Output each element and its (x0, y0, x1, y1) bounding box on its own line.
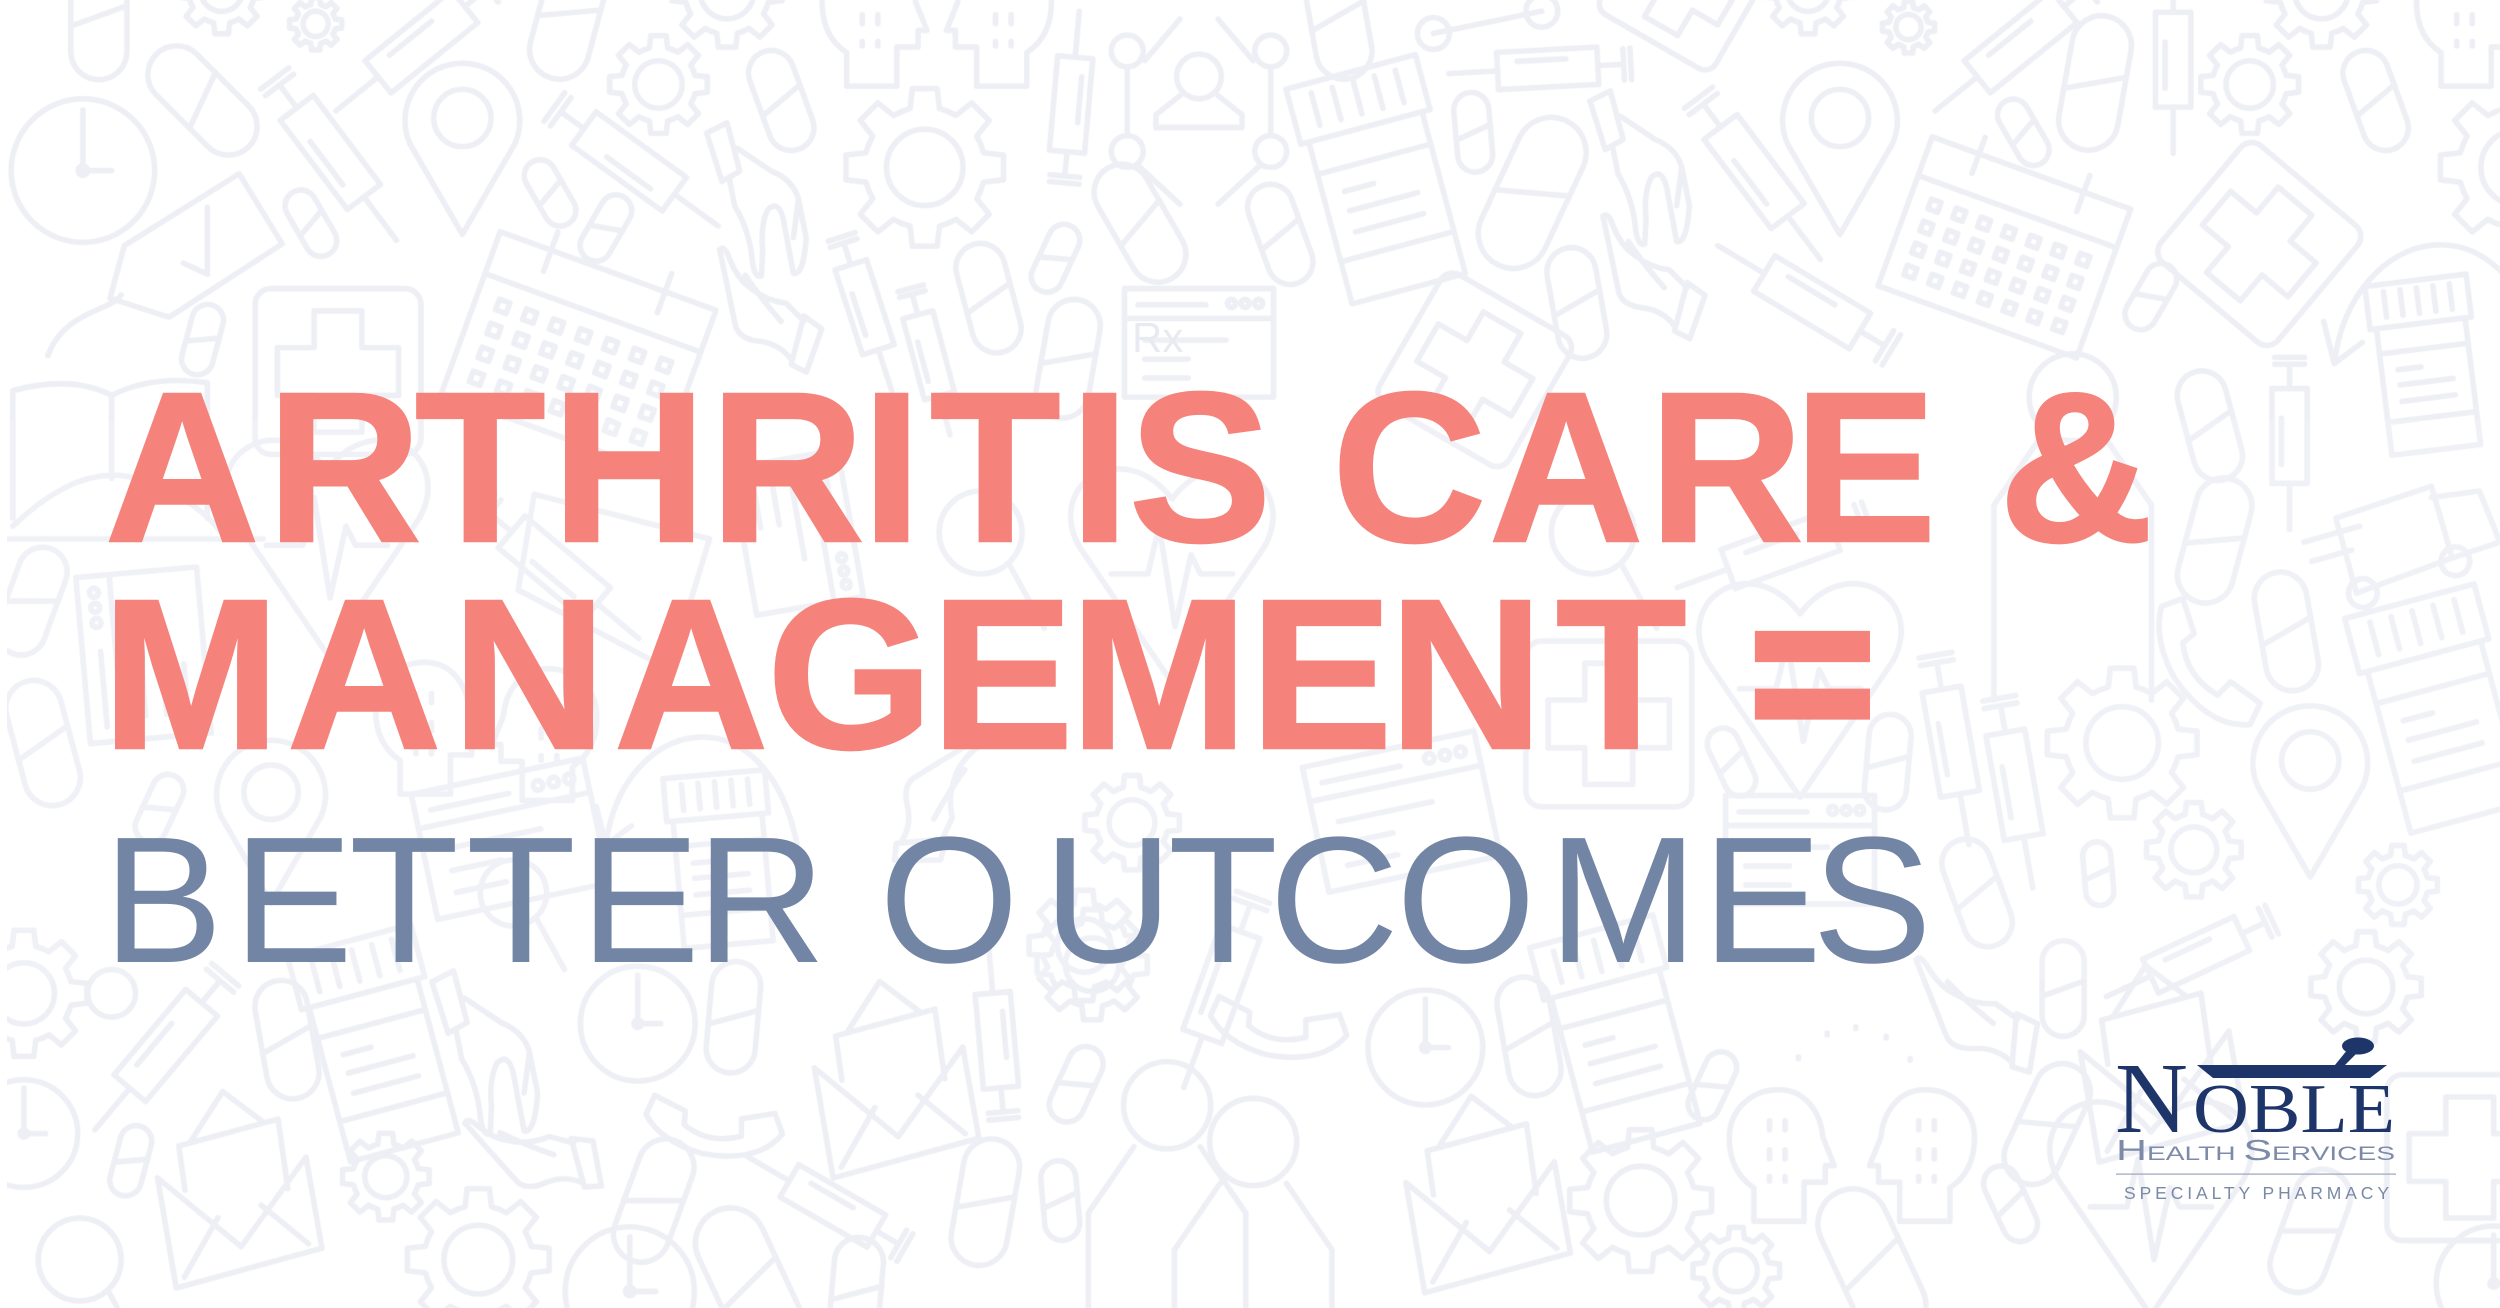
logo tagline: SPECIALTY PHARMACY (2124, 1183, 2389, 1203)
equals sign: = (1750, 554, 1875, 792)
logo icon: mortar bar and pestle (2197, 1038, 2387, 1078)
logo: Noble Health Services (2115, 1038, 2396, 1203)
title (102, 349, 2153, 1001)
heading line 2: MANAGEMENT (102, 556, 1686, 794)
heading line 1: ARTHRITIS CARE & (105, 349, 2153, 587)
icon label: Rx: Rx (1132, 314, 1183, 361)
logo wordmark (2115, 1042, 2395, 1154)
subheading: BETTER OUTCOMES (103, 800, 1932, 1001)
logo wordmark: OBLE (2193, 1071, 2395, 1148)
logo wordmark: N (2115, 1042, 2188, 1154)
logo line: Health Services: H EALTH S ERVICES (2116, 1135, 2395, 1167)
